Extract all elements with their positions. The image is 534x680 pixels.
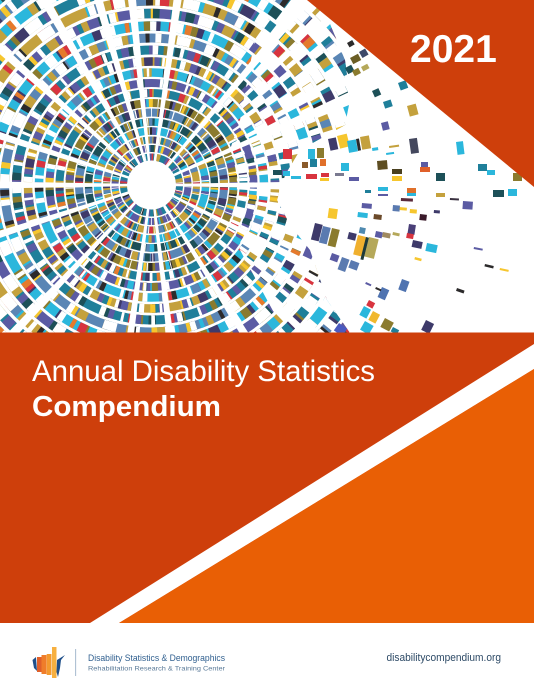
title band: [0, 332, 534, 623]
white diagonal stripe: [90, 344, 534, 623]
organisation name: Disability Statistics & Demographics: [88, 653, 225, 663]
organisation subtitle: Rehabilitation Research & Training Center: [88, 666, 226, 672]
website url: disabilitycompendium.org: [386, 652, 501, 664]
footer logo: map with bars: [32, 647, 65, 678]
white centre hole: [128, 162, 175, 208]
year: 2021: [410, 28, 497, 71]
top right corner triangle: [307, 0, 534, 187]
logo divider: [74, 649, 77, 676]
radial mosaic of coloured ring segments: [0, 0, 350, 332]
white breakup of rings towards the right edge of the mosaic: [230, 0, 350, 332]
title line 1: Annual Disability Statistics: [32, 355, 375, 388]
title line 2: Compendium: [32, 391, 221, 423]
radial white gaps between sectors: [0, 0, 350, 332]
orange triangle: [119, 369, 534, 623]
scattered fragments fading to the right: [273, 40, 522, 336]
